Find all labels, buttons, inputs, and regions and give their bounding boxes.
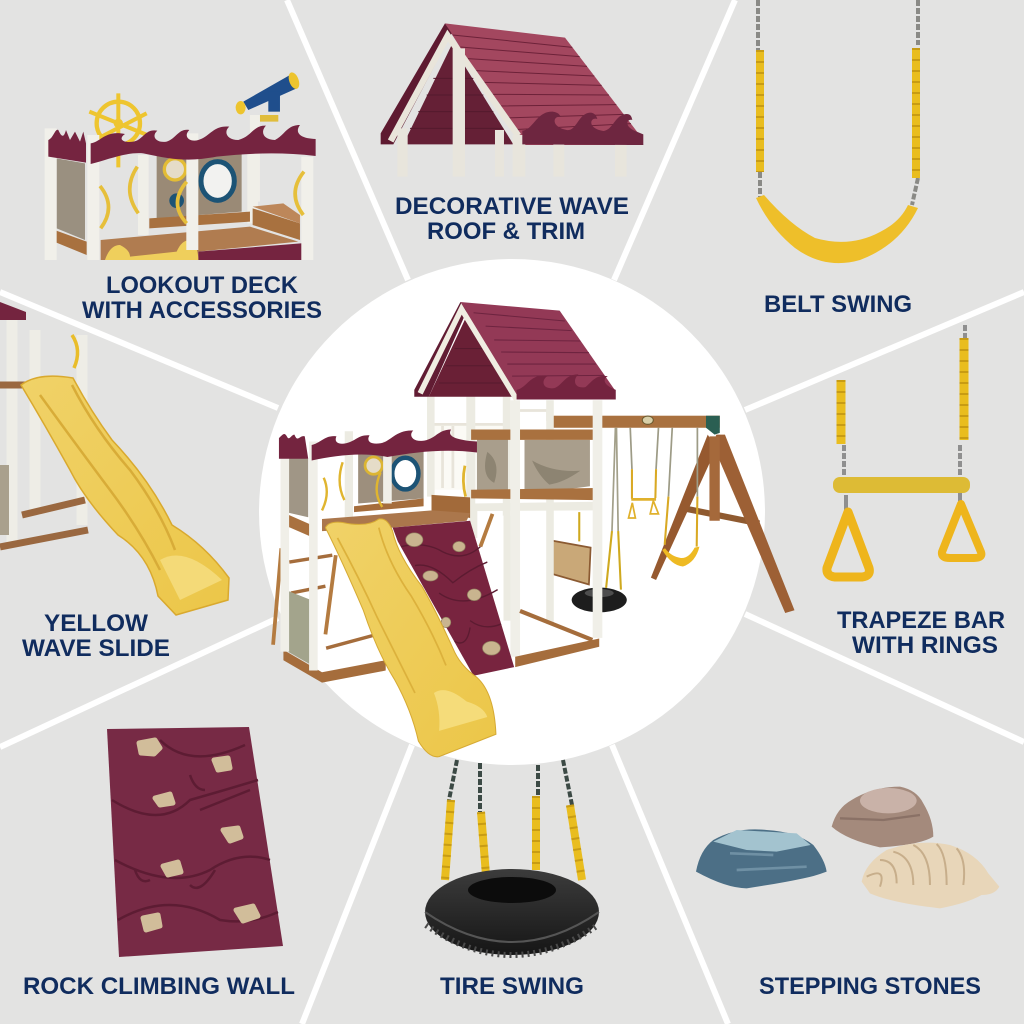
label: wave roof: DECORATIVE WAVE: [395, 193, 629, 220]
roof: [414, 302, 616, 400]
label: tire swing: TIRE SWING: [440, 973, 584, 1000]
panel: wave roof: [381, 23, 643, 177]
panel: lookout deck: [48, 71, 317, 260]
label: wave roof: [395, 193, 629, 245]
label: lookout deck: LOOKOUT DECK: [106, 272, 299, 299]
panel: belt swing: [756, 0, 918, 318]
panel: climbing wall: [23, 727, 295, 1000]
treasure map sign: [553, 541, 591, 584]
label: stepping stones: STEPPING STONES: [759, 973, 981, 1000]
label: lookout deck: [82, 272, 322, 324]
panel: tire swing: [425, 760, 599, 1000]
label: trapeze: WITH RINGS: [852, 632, 998, 659]
icon: ship wheel: [89, 93, 147, 167]
label: wave roof: ROOF & TRIM: [427, 218, 585, 245]
icon: telescope: [236, 71, 301, 122]
panel: central playset: [259, 259, 795, 765]
tower: [431, 328, 599, 667]
icon: small tire: [572, 588, 627, 612]
lookout deck: [273, 429, 492, 683]
label: belt swing: BELT SWING: [764, 291, 912, 318]
label: trapeze: [837, 607, 1005, 659]
label: climbing wall: ROCK CLIMBING WALL: [23, 973, 295, 1000]
label: yellow slide: YELLOW: [44, 610, 148, 637]
label: lookout deck: WITH ACCESSORIES: [82, 297, 322, 324]
climbing wall: [393, 521, 514, 676]
swing frame: [552, 416, 795, 613]
panel: stepping stones: [696, 787, 999, 908]
label: yellow slide: WAVE SLIDE: [22, 635, 170, 662]
slide: [325, 519, 496, 757]
icon: swings: [579, 428, 699, 590]
panel: trapeze: [827, 325, 1005, 659]
panel: yellow slide: [0, 302, 229, 662]
label: trapeze: TRAPEZE BAR: [837, 607, 1005, 634]
label: yellow slide: [22, 610, 170, 662]
